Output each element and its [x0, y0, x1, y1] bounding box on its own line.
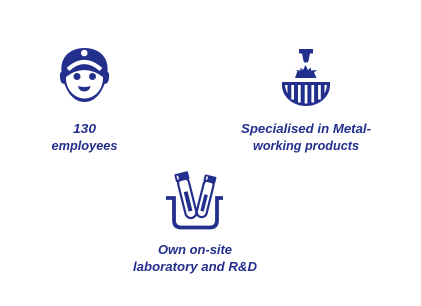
label: specialised in metal-working products: Specialised in Metal- — [241, 121, 371, 136]
label: own on-site laboratory and R&D: Own on-site — [158, 242, 232, 257]
label: 130 employees — [52, 121, 118, 153]
label: 130 employees: employees — [52, 138, 118, 153]
label: specialised in metal-working products — [241, 121, 371, 153]
icon: test tubes in tray — [166, 171, 223, 228]
label: 130 employees: 130 — [73, 121, 97, 136]
icon: employee face with cap — [60, 48, 109, 102]
label: own on-site laboratory and R&D: laboratory and R&D — [133, 259, 258, 274]
label: specialised in metal-working products: working products — [253, 138, 359, 153]
label: own on-site laboratory and R&D — [133, 242, 258, 274]
icon: metalworking laser and bowl — [282, 49, 330, 106]
